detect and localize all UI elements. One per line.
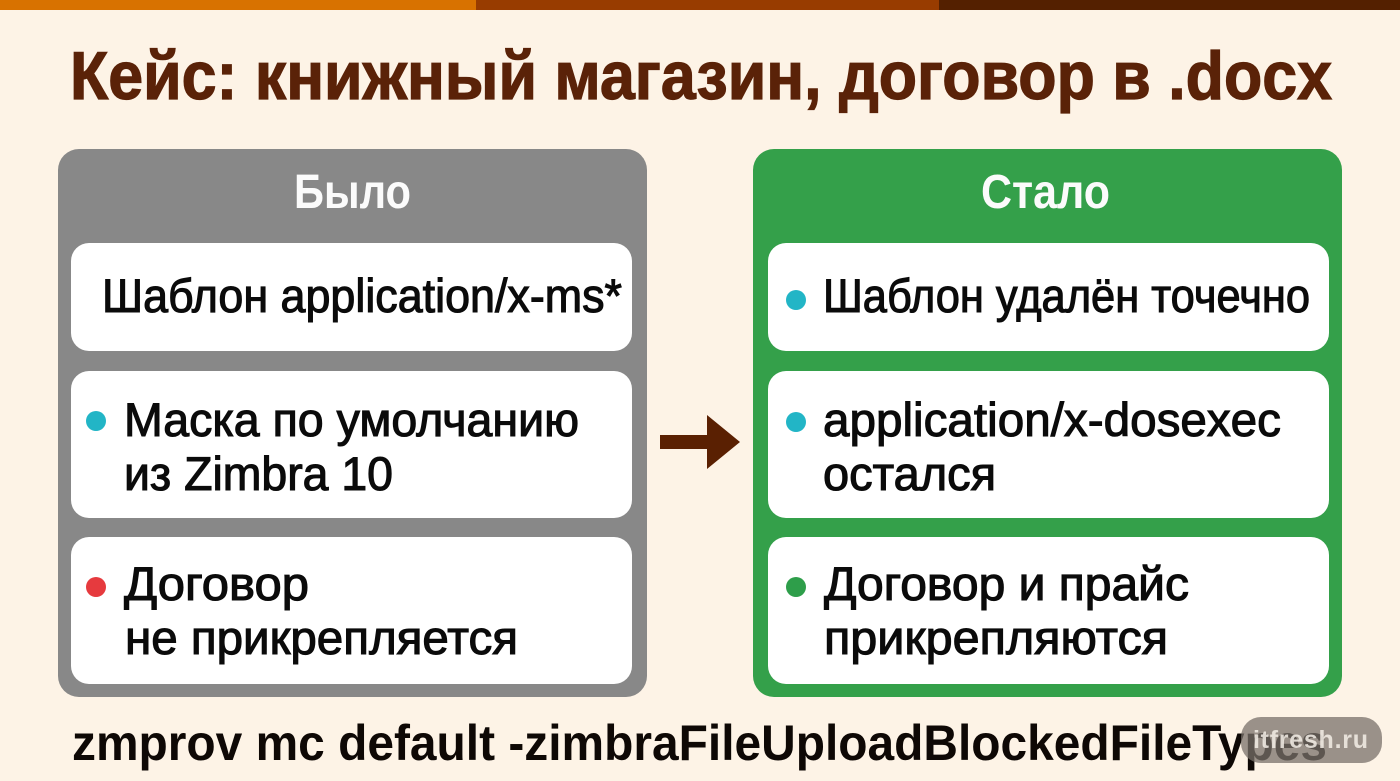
arrow [660,415,740,469]
top colour bar [0,0,1400,10]
card: dosexec kept [768,371,1329,518]
card: default mask: Маска по умолчанию [124,393,579,446]
card: dosexec kept: остался [823,447,996,500]
panel: after [753,149,1342,697]
card: contract fails [71,537,632,684]
card: template removed: Шаблон удалён точечно [823,269,1310,322]
card: files attach [768,537,1329,684]
card: template: Шаблон application/x-ms* [102,269,622,322]
title: Кейс: книжный магазин, договор в .docx [70,38,1332,114]
heading: before: Было [294,166,411,219]
heading: after: Стало [981,166,1110,219]
card: default mask: из Zimbra 10 [124,447,393,500]
card: template [71,243,632,351]
card: default mask [71,371,632,518]
card: files attach: прикрепляются [824,611,1168,664]
watermark: itfresh.ru [1253,726,1368,754]
card: files attach: Договор и прайс [824,557,1189,610]
card: contract fails: не прикрепляется [125,611,518,664]
panel: before [58,149,647,697]
card: contract fails: Договор [124,557,309,610]
command line: zmprov mc default -zimbraFileUploadBlockedFileTypes [72,715,1327,771]
card: dosexec kept: application/x-dosexec [823,393,1281,446]
watermark [1241,717,1382,763]
card: template removed [768,243,1329,351]
